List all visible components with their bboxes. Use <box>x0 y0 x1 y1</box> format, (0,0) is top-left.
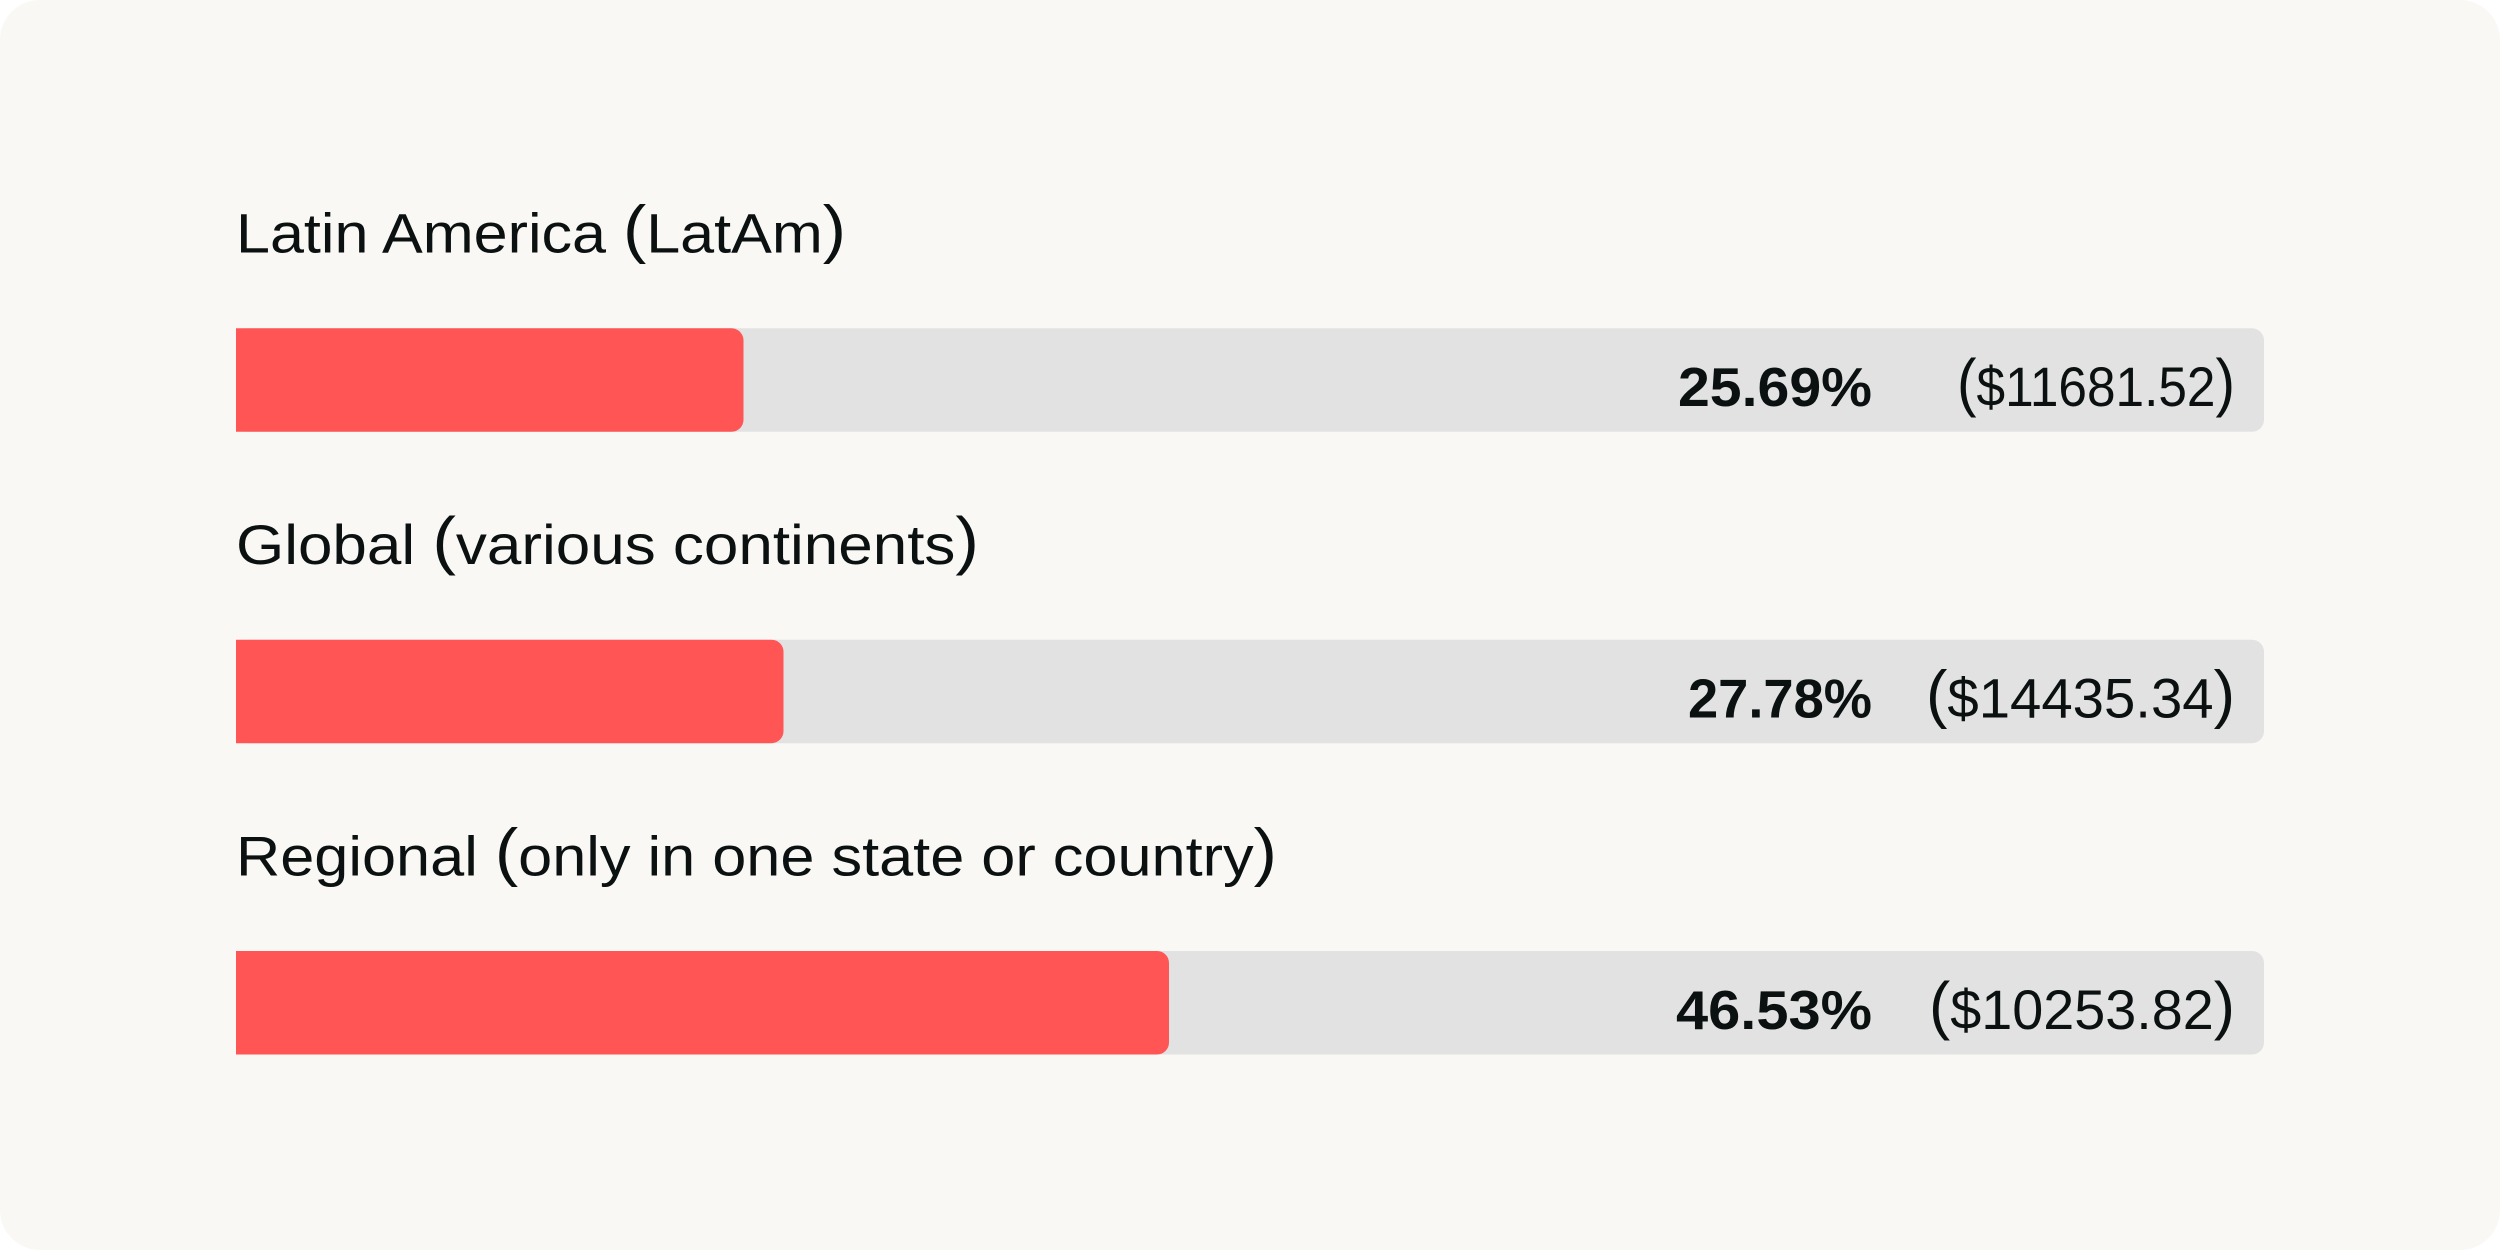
label: Regional: Regional <box>236 825 457 888</box>
amount: Latin America: ( <box>1957 346 1977 418</box>
amount: Global: ( <box>1926 658 1947 730</box>
row: Global <box>236 504 2264 743</box>
label: Latin America: Latin America <box>236 202 575 265</box>
label: Global: ( <box>432 504 456 576</box>
bar track: Regional <box>236 951 2264 1054</box>
bar fill: Latin America <box>236 328 744 432</box>
bar track: Global <box>236 640 2264 743</box>
bar track: Latin America <box>236 328 2264 432</box>
bar fill: Global <box>236 640 784 743</box>
amount: Latin America: ) <box>2215 346 2235 418</box>
label: Regional: only in one state or country <box>518 825 1254 888</box>
label: Regional: ( <box>495 816 518 888</box>
row: Regional <box>236 816 2264 1054</box>
label: Latin America: ( <box>623 193 646 265</box>
row: Latin America <box>236 193 2264 432</box>
percentage: Latin America: 25.69% <box>1678 356 1872 418</box>
amount: Global: ) <box>2214 658 2235 730</box>
percentage: Global: 27.78% <box>1688 668 1872 730</box>
amount: Regional: ) <box>2214 969 2235 1041</box>
amount: Latin America: $11681.52 <box>1977 355 2215 418</box>
amount: Regional: ( <box>1929 969 1950 1041</box>
bar fill: Regional <box>236 951 1169 1054</box>
label: Global: ) <box>955 504 979 576</box>
label: Global: various continents <box>456 513 955 576</box>
label: Global: Global <box>236 513 398 576</box>
label: Latin America: LatAm <box>646 202 823 265</box>
amount: Global: $14435.34 <box>1947 666 2214 730</box>
label: Regional: ) <box>1254 816 1277 888</box>
percentage: Regional: 46.53% <box>1676 979 1872 1041</box>
amount: Regional: $10253.82 <box>1950 978 2214 1041</box>
label: Latin America: ) <box>823 193 846 265</box>
